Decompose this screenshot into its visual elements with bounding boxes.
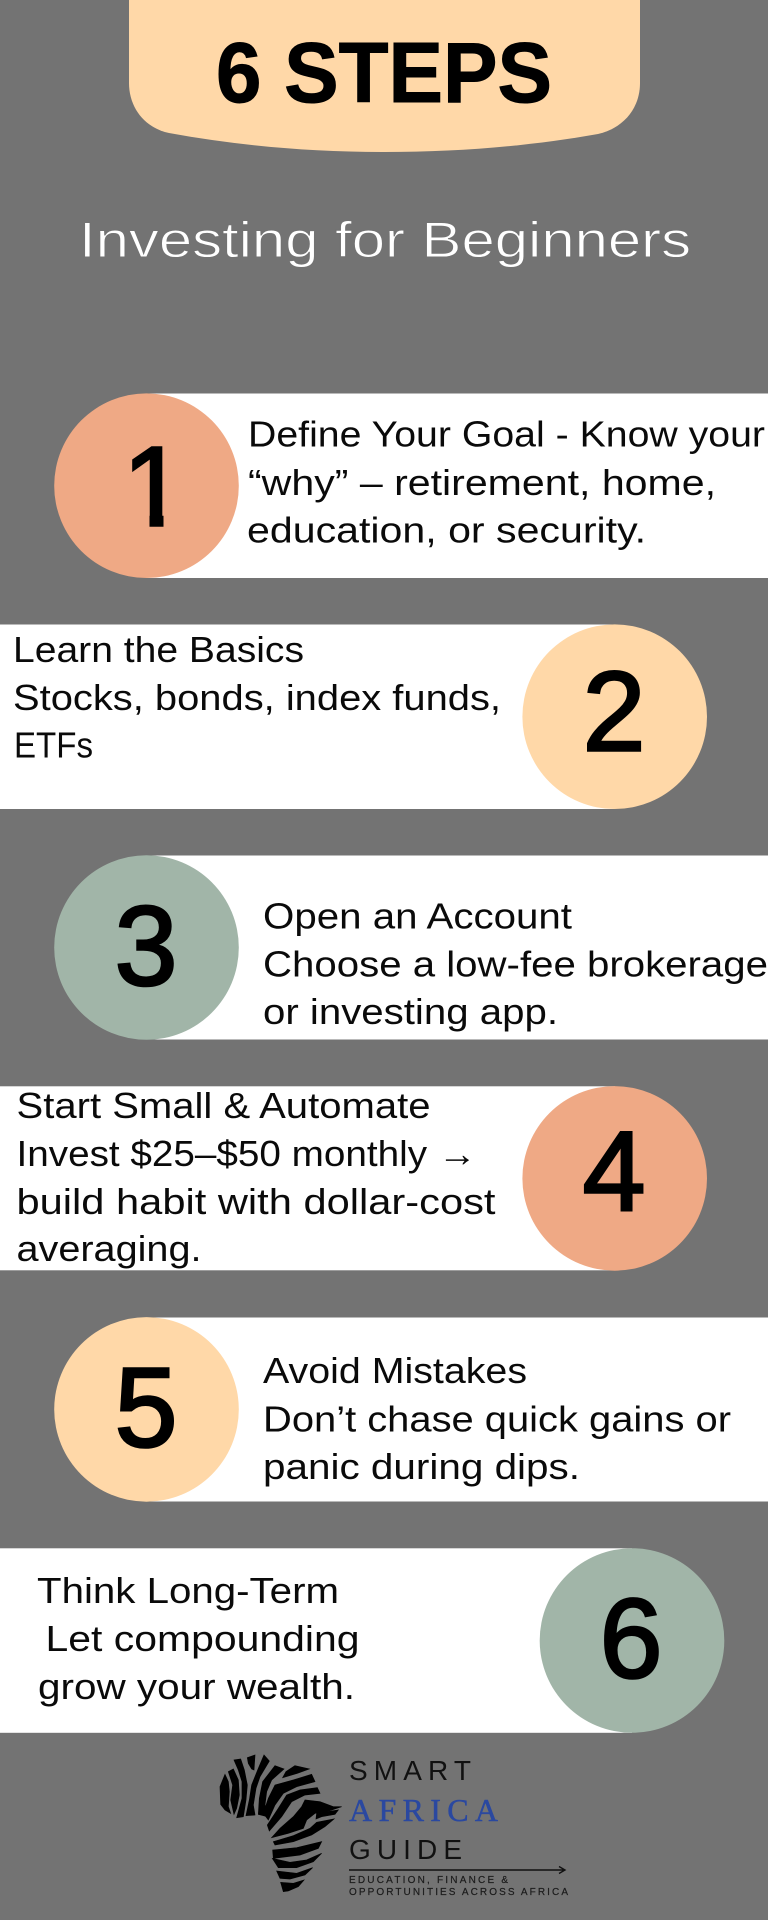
step 5: Avoid Mistakes: [263, 1350, 527, 1391]
step 3: Open an Account: [263, 896, 572, 937]
step 6: 6: [600, 1576, 662, 1702]
step 2: [0, 624, 707, 809]
logo: Smart Africa Guide: [220, 1755, 568, 1898]
wordmark: SMART: SMART: [349, 1755, 471, 1786]
title banner: [129, 0, 640, 152]
step 5: [54, 1317, 768, 1502]
step 6: Let compounding: [46, 1618, 360, 1659]
wordmark: AFRICA: AFRICA: [349, 1792, 498, 1828]
arrow rule: [349, 1866, 565, 1874]
step 2: Learn the Basics: [13, 629, 304, 670]
step 3: 3: [115, 883, 177, 1009]
step 5: panic during dips.: [263, 1446, 580, 1487]
logo: Smart Africa Guide: OPPORTUNITIES ACROSS AFRICA: [349, 1887, 568, 1898]
step 2: 2: [583, 648, 645, 774]
icon: zebra-striped Africa: [220, 1755, 342, 1892]
step 6: [0, 1548, 724, 1733]
step 4: averaging.: [16, 1228, 202, 1269]
title banner: 6 STEPS: [216, 26, 552, 121]
step 1: education, or security.: [247, 510, 646, 551]
step 4: [0, 1085, 707, 1271]
subtitle: Investing for Beginners: [79, 212, 691, 268]
tagline: EDUCATION, FINANCE &: [349, 1875, 508, 1886]
step 5: Don’t chase quick gains or: [263, 1399, 731, 1440]
step 5: 5: [115, 1344, 177, 1470]
step 3: [54, 855, 768, 1040]
step 3: Choose a low-fee brokerage: [263, 944, 768, 985]
step 6: grow your wealth.: [38, 1666, 355, 1707]
step 6: Think Long-Term: [37, 1570, 339, 1611]
step 1: “why” – retirement, home,: [248, 462, 716, 503]
step 4: Start Small & Automate: [16, 1085, 431, 1126]
step 2: Stocks, bonds, index funds,: [13, 677, 501, 718]
step 4: build habit with dollar-cost: [16, 1181, 495, 1222]
wordmark: GUIDE: GUIDE: [349, 1834, 462, 1865]
step 1: Define Your Goal - Know your: [248, 414, 765, 455]
step 1: 1: [123, 424, 185, 550]
step 3: or investing app.: [263, 991, 558, 1032]
step 2: ETFs: [14, 725, 93, 766]
step 4: 4: [583, 1108, 645, 1234]
step 4: Invest $25–$50 monthly →: [16, 1133, 476, 1174]
step 1: [54, 393, 768, 578]
